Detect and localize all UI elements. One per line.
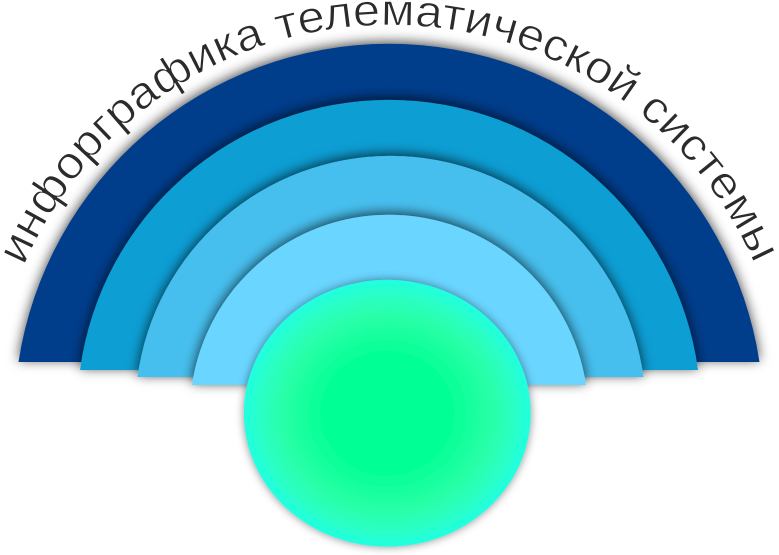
arc band 4: light blue [192, 215, 586, 385]
arc band 1: dark navy [18, 44, 760, 362]
central glowing circle [244, 280, 531, 547]
arc band 2: blue [80, 100, 698, 370]
arc band 3: sky blue [138, 156, 644, 377]
